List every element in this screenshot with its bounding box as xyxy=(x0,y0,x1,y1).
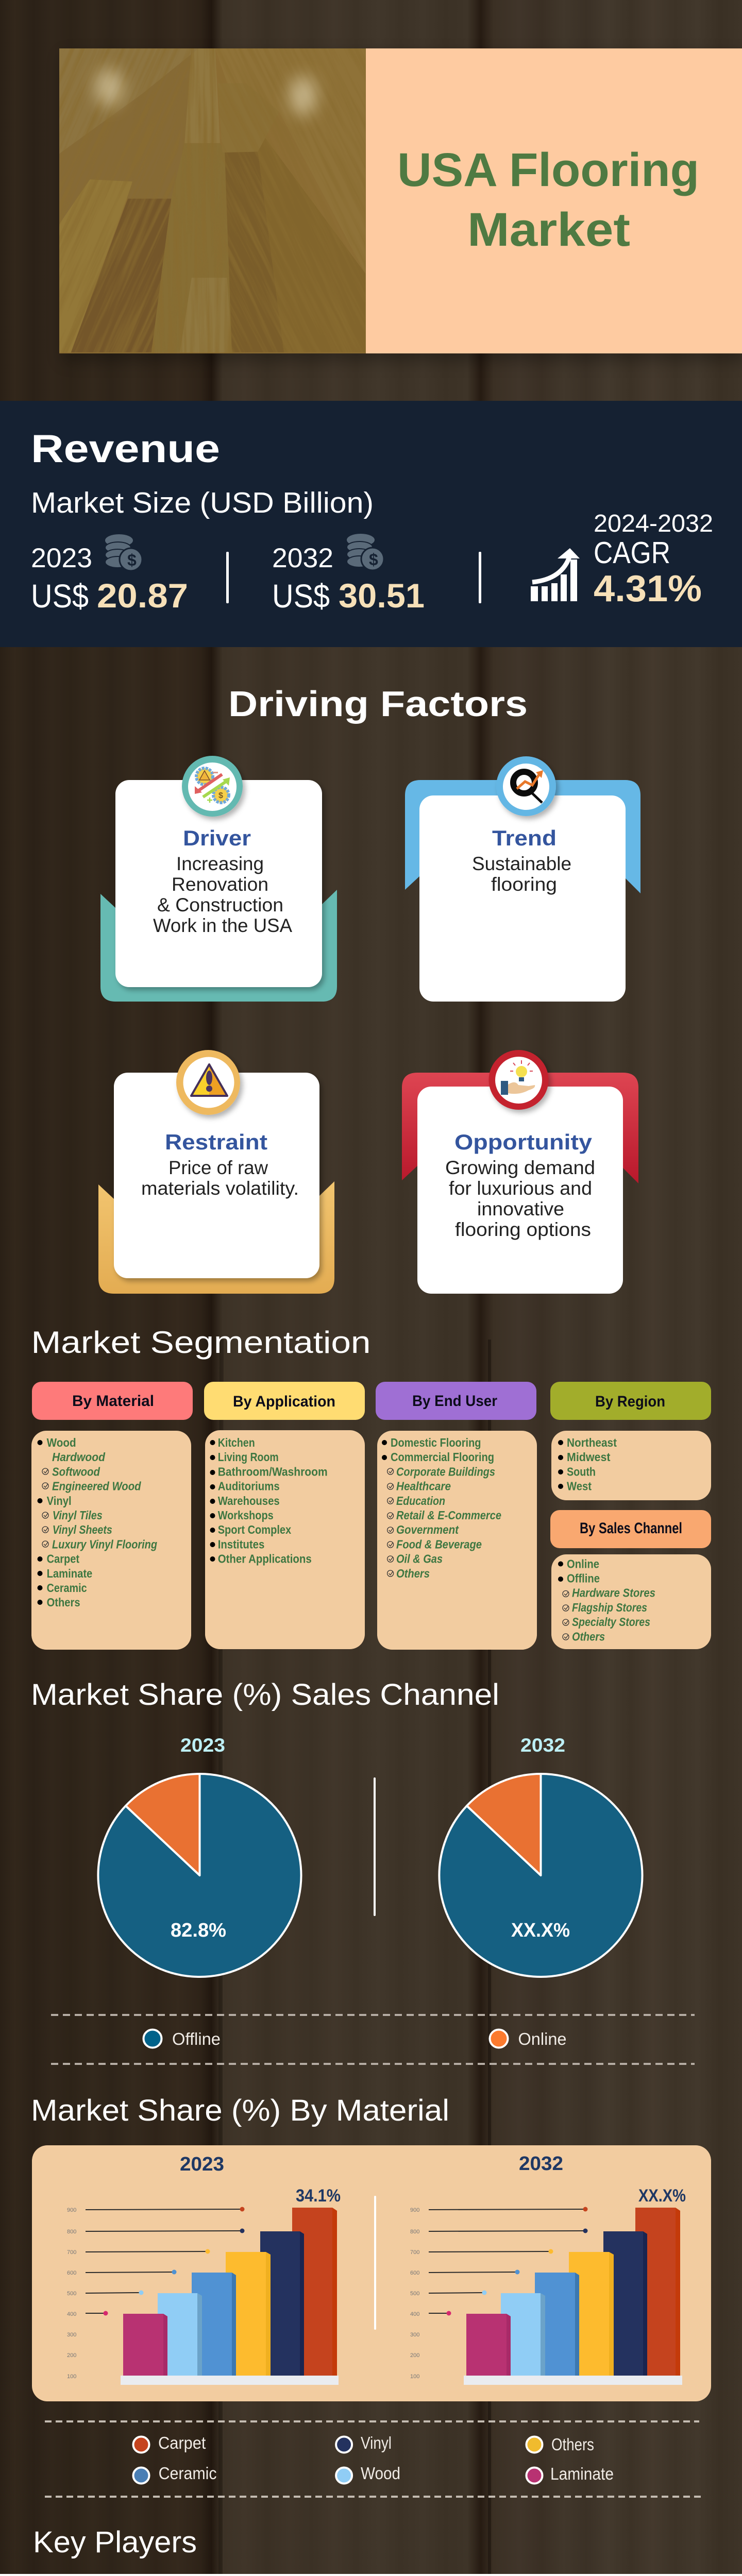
card: restraint xyxy=(98,1050,334,1294)
revenue 2032: 30.51 xyxy=(339,577,425,615)
segment: by end user: Corporate Buildings xyxy=(396,1465,495,1478)
heading: market share sales channel: Market Share (%) Sales Channel xyxy=(31,1678,499,1711)
icon: trend xyxy=(496,756,556,816)
segment: by region: By Region xyxy=(595,1393,665,1410)
revenue 2032: 2032 xyxy=(272,543,333,573)
legend: material: Wood xyxy=(361,2464,400,2483)
wood floor photo xyxy=(59,48,366,353)
segment: by region: Northeast xyxy=(567,1436,617,1449)
divider xyxy=(374,2196,376,2330)
driver text: Work in the USA xyxy=(153,915,292,936)
segment: by sales channel: Hardware Stores xyxy=(572,1586,655,1600)
legend: sales channel: Offline xyxy=(172,2029,221,2048)
bar chart 2023: 300 xyxy=(67,2332,76,2338)
market size label: Market Size (USD Billion) xyxy=(31,486,374,519)
segment: by end user: Domestic Flooring xyxy=(391,1436,481,1449)
segment: by region: South xyxy=(567,1465,596,1478)
bar chart 2032: 200 xyxy=(410,2352,419,2359)
legend: material: Carpet xyxy=(158,2433,206,2452)
bar chart 2023: 200 xyxy=(67,2352,76,2359)
legend: material xyxy=(133,2433,614,2483)
bar chart 2023: 2023 xyxy=(180,2154,224,2175)
driver text: Renovation xyxy=(172,874,268,895)
CAGR: CAGR xyxy=(594,536,670,570)
legend: material: Vinyl xyxy=(361,2433,392,2452)
segment: by material: Engineered Wood xyxy=(52,1480,141,1493)
segment: by application: Warehouses xyxy=(218,1494,280,1507)
bar chart 2032: 400 xyxy=(410,2311,419,2317)
bar chart 2032: 300 xyxy=(410,2332,419,2338)
divider xyxy=(479,552,481,603)
bar chart 2032: 600 xyxy=(410,2270,419,2276)
opportunity text: Growing demand xyxy=(445,1157,595,1178)
segment: by sales channel: Others xyxy=(572,1630,605,1643)
pie chart 2023: 2023 xyxy=(180,1735,225,1756)
pie chart 2023: 82.8% xyxy=(171,1920,226,1941)
segment: by sales channel: Specialty Stores xyxy=(572,1615,650,1629)
bar chart 2032: 2032 xyxy=(519,2153,563,2175)
heading: market share by material: Market Share (%) By Material xyxy=(31,2094,449,2127)
segment: by application: Bathroom/Washroom xyxy=(218,1465,328,1478)
segment: by material: Vinyl xyxy=(47,1494,72,1507)
segment: by end user xyxy=(376,1382,537,1650)
icon: warning xyxy=(176,1050,240,1115)
segment: by end user: Others xyxy=(396,1567,430,1580)
divider xyxy=(226,552,229,603)
icon: coins 2032: $ xyxy=(369,550,378,569)
opportunity text: for luxurious and xyxy=(449,1178,592,1199)
segment: by end user: Education xyxy=(396,1494,445,1507)
segment: by end user: Healthcare xyxy=(396,1480,451,1493)
bar chart 2032: 500 xyxy=(410,2291,419,2297)
segment: by end user: Oil & Gas xyxy=(396,1552,443,1566)
opportunity text: innovative xyxy=(477,1198,564,1219)
segment: by application xyxy=(204,1382,365,1649)
divider xyxy=(374,1777,376,1916)
bar chart 2032: 900 xyxy=(410,2207,419,2213)
icon: coins 2023 xyxy=(105,534,142,571)
bar chart 2032: 700 xyxy=(410,2249,419,2256)
pie chart 2023 xyxy=(98,1735,301,1977)
driver text xyxy=(153,853,292,936)
revenue 2023 xyxy=(31,543,188,615)
segment: by sales channel: Offline xyxy=(567,1571,600,1585)
bar chart 2032 xyxy=(410,2153,686,2385)
segment: by application: Sport Complex xyxy=(218,1523,291,1536)
legend: material: Ceramic xyxy=(159,2464,217,2483)
segment: by application: Other Applications xyxy=(218,1552,312,1566)
heading: driving factors: Driving Factors xyxy=(228,684,528,724)
CAGR: 2024-2032 xyxy=(594,510,713,537)
opportunity text: flooring options xyxy=(455,1219,591,1240)
legend: material: Laminate xyxy=(550,2464,614,2483)
segment: by sales channel: Flagship Stores xyxy=(572,1601,647,1614)
icon: coins 2032 xyxy=(347,534,384,570)
pie chart 2032: 2032 xyxy=(520,1735,565,1756)
trend title: Trend xyxy=(492,826,556,850)
title: Market xyxy=(467,204,630,256)
trend text: flooring xyxy=(491,874,557,895)
segment: by application: Institutes xyxy=(218,1537,264,1551)
revenue 2023: 2023 xyxy=(31,543,92,573)
segment: by region xyxy=(550,1382,711,1500)
revenue 2023: US$ xyxy=(31,578,89,615)
segment: by application: Kitchen xyxy=(218,1436,255,1449)
bar chart 2023 xyxy=(67,2154,341,2385)
opportunity text xyxy=(445,1157,595,1240)
segment: by sales channel xyxy=(550,1510,711,1649)
icon: coins 2023: $ xyxy=(127,551,137,569)
bar chart 2023: 100 xyxy=(67,2374,76,2380)
segment: by sales channel: By Sales Channel xyxy=(580,1520,682,1537)
legend: sales channel: Online xyxy=(518,2029,567,2048)
heading: key players: Key Players xyxy=(33,2526,197,2559)
heading: market segmentation: Market Segmentation xyxy=(31,1325,371,1360)
segment: by application: Auditoriums xyxy=(218,1480,280,1493)
bar chart 2023: 900 xyxy=(67,2207,76,2213)
panel: key players logos xyxy=(0,2574,742,2576)
restraint text: materials volatility. xyxy=(141,1178,299,1199)
trend text: Sustainable xyxy=(472,853,571,874)
segment: by material: Luxury Vinyl Flooring xyxy=(52,1537,157,1551)
bar chart 2032: 100 xyxy=(410,2374,419,2380)
legend: material: Others xyxy=(551,2435,594,2454)
driver title: Driver xyxy=(183,826,251,850)
bar chart 2023: 34.1% xyxy=(296,2186,341,2206)
segment: by material xyxy=(31,1382,193,1650)
panel: material charts xyxy=(32,2145,711,2401)
card: driver xyxy=(100,756,337,1002)
CAGR: 4.31% xyxy=(594,568,702,609)
segment: by material: Vinyl Sheets xyxy=(53,1523,112,1536)
pie chart 2032 xyxy=(439,1735,642,1977)
restraint text: Price of raw xyxy=(168,1157,268,1178)
bar chart 2023: 500 xyxy=(67,2291,76,2297)
bar chart 2023: 800 xyxy=(67,2229,76,2235)
card: opportunity xyxy=(402,1050,638,1294)
bar chart 2023: 400 xyxy=(67,2311,76,2317)
pie chart 2032: XX.X% xyxy=(511,1920,570,1941)
segment: by application: Workshops xyxy=(218,1509,274,1522)
segment: by material: Ceramic xyxy=(47,1581,87,1595)
segment: by end user: Government xyxy=(396,1523,459,1536)
segment: by end user: Commercial Flooring xyxy=(391,1450,494,1464)
segment: by material: Hardwood xyxy=(52,1450,106,1464)
legend: sales channel xyxy=(143,2029,567,2048)
revenue 2032: US$ xyxy=(272,578,330,615)
bar chart 2023: 600 xyxy=(67,2270,76,2276)
card: trend xyxy=(405,756,640,1002)
icon: driver xyxy=(182,756,243,817)
segment: by end user: Food & Beverage xyxy=(396,1537,482,1551)
segment: by region: Midwest xyxy=(567,1450,611,1464)
CAGR xyxy=(594,510,713,609)
segment: by material: Others xyxy=(47,1596,80,1609)
segment: by material: Wood xyxy=(47,1436,76,1449)
icon: driver: $ xyxy=(218,791,223,800)
segment: by end user: Retail & E-Commerce xyxy=(396,1509,501,1522)
bar chart 2023: 700 xyxy=(67,2249,76,2256)
segment: by material: Softwood xyxy=(52,1465,100,1478)
segment: by material: Vinyl Tiles xyxy=(53,1509,103,1522)
bar chart 2032: XX.X% xyxy=(638,2186,686,2206)
driver text: & Construction xyxy=(157,894,283,916)
panel: revenue band xyxy=(0,401,742,647)
opportunity title: Opportunity xyxy=(454,1130,593,1154)
segment: by sales channel: Online xyxy=(567,1557,599,1570)
restraint text xyxy=(141,1157,299,1199)
segment: by end user: By End User xyxy=(412,1393,497,1410)
heading: revenue: Revenue xyxy=(31,427,220,471)
title: USA Flooring xyxy=(397,144,699,196)
icon: growth chart xyxy=(531,548,580,601)
segment: by material: By Material xyxy=(72,1393,154,1410)
bar chart 2032: 800 xyxy=(410,2229,419,2235)
icon: opportunity xyxy=(488,1050,548,1110)
trend text xyxy=(472,853,571,895)
title panel xyxy=(366,48,742,353)
title xyxy=(397,144,699,256)
segment: by application: By Application xyxy=(233,1393,335,1410)
hero panel xyxy=(59,48,742,363)
segment: by material: Laminate xyxy=(47,1567,92,1580)
driver text: Increasing xyxy=(176,853,264,874)
revenue 2032 xyxy=(272,543,425,615)
segment: by application: Living Room xyxy=(218,1450,279,1464)
revenue 2023: 20.87 xyxy=(97,577,188,615)
segment: by region: West xyxy=(567,1480,592,1493)
segment: by material: Carpet xyxy=(47,1552,79,1566)
restraint title: Restraint xyxy=(165,1130,267,1154)
